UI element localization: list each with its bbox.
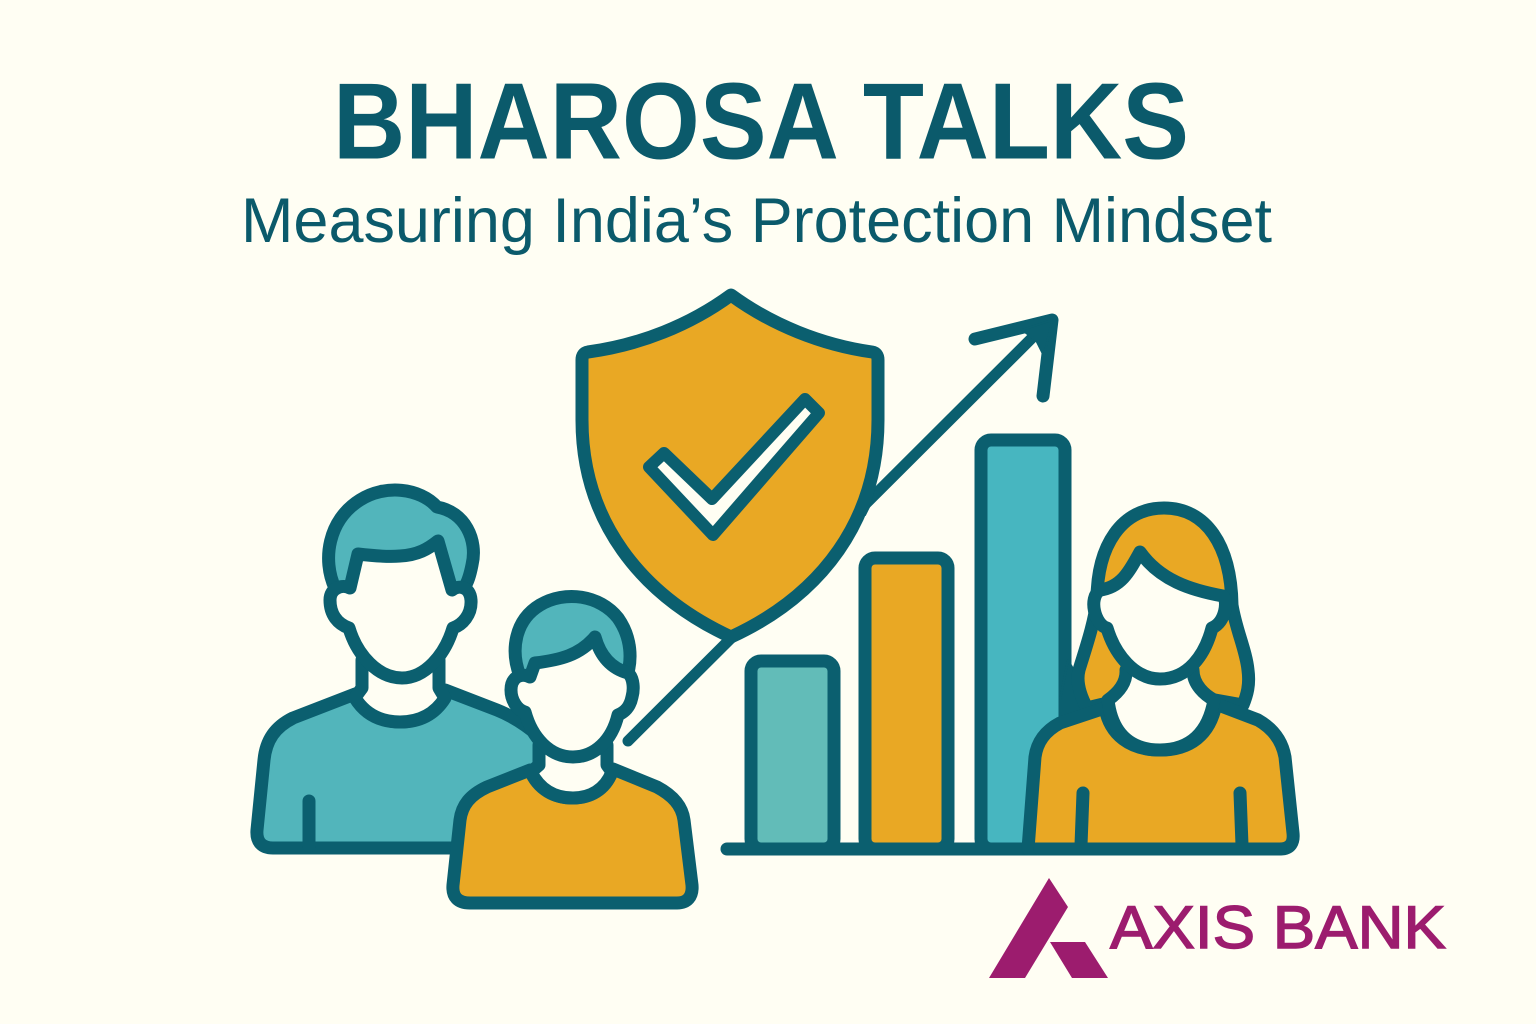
dark gap between bar and hair <box>1060 660 1092 724</box>
man neck <box>355 660 445 722</box>
boy hair <box>515 596 630 690</box>
shield <box>582 295 878 637</box>
woman neck <box>1108 670 1214 750</box>
logo mark <box>989 878 1108 978</box>
chart baseline <box>727 842 1040 856</box>
logo: Axis Bank <box>989 878 1446 978</box>
woman back hair <box>1078 508 1249 708</box>
figure: man <box>257 490 540 848</box>
title: BHAROSA TALKS <box>333 60 1189 182</box>
arrow: rising trend <box>628 320 1052 741</box>
woman right arm line <box>1240 793 1242 845</box>
man face <box>330 541 471 678</box>
subtitle: Measuring India’s Protection Mindset <box>241 186 1272 256</box>
man arm line <box>302 801 316 846</box>
boy shirt <box>453 769 692 903</box>
bar chart <box>727 440 1065 849</box>
boy neck <box>531 745 612 798</box>
woman face <box>1094 552 1225 679</box>
icon: shield with check mark <box>582 295 878 637</box>
boy face <box>511 637 633 757</box>
figure: boy <box>453 596 692 903</box>
woman baseline edge <box>1040 842 1280 856</box>
man shirt <box>257 690 540 848</box>
check mark <box>649 399 819 535</box>
logo wordmark: AXIS BANK <box>1110 894 1446 961</box>
bar: short <box>751 661 834 849</box>
woman left arm line <box>1081 793 1083 845</box>
bar: medium <box>865 558 948 849</box>
man hair <box>329 490 473 600</box>
bar: tall <box>981 440 1065 849</box>
woman shirt <box>1028 704 1293 849</box>
figure: woman <box>1028 508 1293 849</box>
